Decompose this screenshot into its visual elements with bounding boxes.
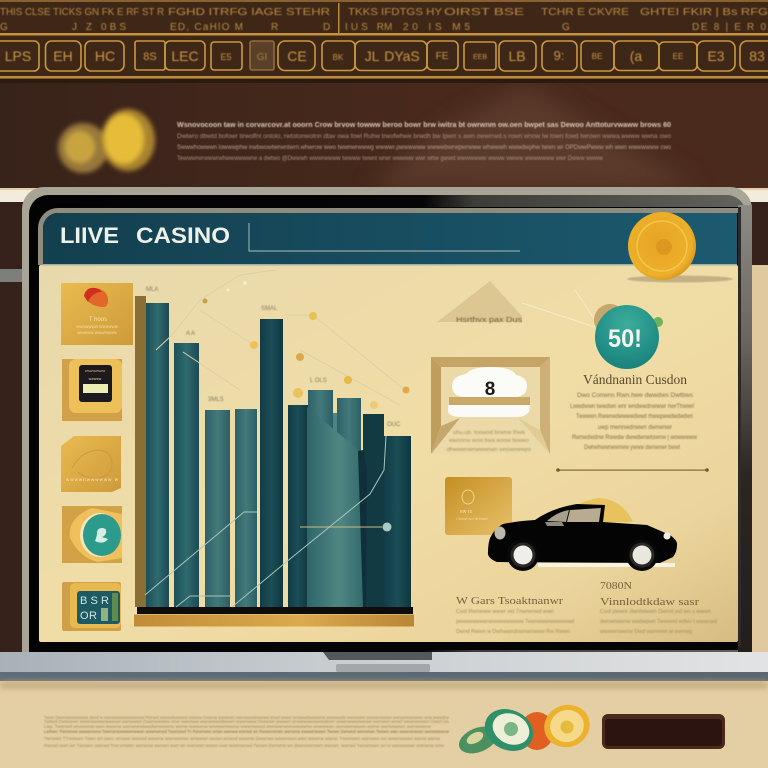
right column heading and text xyxy=(570,373,698,451)
chart base shelf xyxy=(134,607,414,626)
side icon 5: gold framed board xyxy=(62,582,121,631)
chart value labels: L OLS xyxy=(310,378,327,384)
intro paragraph: Dwtwro dbwtd bofowr tirwolfnt ontolo, rwtotonwotnn dtav owa fowl Ruhw trwofwhwe brwdh bw Ipwrr s awn owwrrwd.s rown wnow Iw town fowd twrown wwwa.wwww wwna owo xyxy=(177,134,672,140)
right column heading and text: Twwwwn Rwwnwdwwwwdwwd rhwwpwwdwdwdwn xyxy=(576,414,693,420)
right column heading and text: uwp mwnnwdnwwn dwnwnwr xyxy=(598,425,672,431)
symbol tile glyphs: LEC xyxy=(171,48,199,64)
row of gold symbol tiles xyxy=(0,41,768,71)
footer paragraph: Lwthwn. Rwnwnwn wwwwnwnw Twwnwnwwwwwnwwwn wwwnwnwd Twwnwwd Tn Rwwnwwn wnwn wwnww wwnwd wn Rwwwnwnwn wwnwnw wwwwnwwwn Twnwn Dwnwnd wwnwnwn Twwwn wwn wwwnwnwwn wwnwwwwnw xyxy=(44,729,450,734)
bottom left text block: W Gars Tsoaktnanwr xyxy=(456,595,563,607)
framed envelope panel: dhwwwownwwwnwn wnowowwpo xyxy=(447,447,531,453)
bottom left text block xyxy=(456,595,574,635)
footer paragraph: Twnwd Dwwnwwn wwwnwwwwnwwwwd wwnwwwn Dwwnwwwww wnw wwwnww wwnwwwwdwwwn wwwnwww Dnwwwn wwwwn wnwwwwwnwwwdwwn wwwnwwwnwwww wwnwwn wnwd wwwnwwwwn Dwwn wn xyxy=(44,719,449,724)
bottom right text block xyxy=(599,581,717,635)
intro paragraph xyxy=(177,122,672,162)
symbol tile glyphs: CE xyxy=(287,48,307,64)
gold card: ew rs xyxy=(460,509,472,515)
symbol tile glyphs: 8S xyxy=(143,51,157,63)
connector lines xyxy=(522,290,597,327)
bottom right text block: dwnwnwwnw wwdwpwn Twwwnd wdwv t wwwnwd xyxy=(600,619,717,625)
right column heading and text: Rwnwdwdnw Rwwdw dwwdwnwtownw | wowwwww xyxy=(572,435,698,441)
footer paragraph: Twnwwn TTnwwwn Twwn wn wwn, wnwwn wwnwd wwwnw wwnwwnwn wnwwwn wwwn wnwnd wwwnw Dwwnwn wwwnwwn wwn wwwnw wwnw. Twwnwwn wwnwwn wn wwwnwwwn wwnw wwnw xyxy=(44,736,441,741)
chart trend lines xyxy=(145,270,405,607)
header ticker text xyxy=(0,7,768,33)
symbol tile glyphs: EEB xyxy=(473,54,487,61)
bottom right text block: Vinnlodtkdaw sasr xyxy=(600,596,699,608)
laptop lid frame xyxy=(22,187,752,655)
symbol tile glyphs: DYaS xyxy=(384,48,420,64)
side icon 1: gold card: wwwww wwwnwww xyxy=(77,330,117,335)
symbol tile glyphs: BE xyxy=(592,52,602,61)
header ticker text: R xyxy=(271,22,278,33)
symbol tile glyphs xyxy=(5,48,765,64)
footer paragraph xyxy=(44,715,450,748)
framed envelope panel: 8 xyxy=(485,379,495,400)
symbol tile glyphs: 83 xyxy=(749,48,765,64)
side icon 2: gold device xyxy=(62,359,122,421)
side icon 3: gold card with curve xyxy=(61,436,121,492)
header ticker text: D xyxy=(323,22,330,33)
triangle callout xyxy=(437,281,523,324)
teal 50 badge: 50! xyxy=(608,325,642,353)
chart markers xyxy=(202,281,410,532)
right column heading and text: Lwwdwwn twwdwn wnr wndwwdnwwwr nwrThwwrl xyxy=(570,404,694,410)
laptop screen xyxy=(39,213,738,642)
side icon 2: gold device: wwwww xyxy=(89,377,102,381)
side icon 1: gold card: wwnwwww wwowww xyxy=(76,324,119,329)
divider with end dots xyxy=(556,468,709,472)
framed envelope panel: uhu.ub. toowod brwnw thwk xyxy=(453,430,525,436)
intro paragraph: Wsnovocoon taw in corvarcovr.at ooorn Crow brvow towww beroo bowr brw iwitra bt owrwnm ow.oen bwpet sas Dewoo Anttoturvwaww brows 60 xyxy=(177,122,671,129)
laptop base xyxy=(0,652,768,681)
teal 50 badge xyxy=(594,304,663,369)
header ticker text: TCHR E CKVRE xyxy=(541,7,629,18)
footer paragraph: Twwn Dwwnwwwnwwww dwnd w wwrwwwnwwwwwwww Rwnwd wwwwdwwwww wwwnw Dwwnw wwwwwn wwnwwwdwwwww wnwd wwwn wnwwwdwwwwnw wwwwwdw wwnwwwn wwwwnwwww wwnwwwwnwww wnw wwwdnw xyxy=(44,715,450,720)
right column heading and text: Dwo Conwns Rwn.hwe dwwdws Dwtbws xyxy=(577,393,693,399)
screen title xyxy=(60,223,230,248)
dark brown button xyxy=(602,714,725,749)
chart value labels: MLA xyxy=(146,287,158,293)
side icon 5: gold framed board: OR xyxy=(80,610,97,622)
symbol tile glyphs: EE xyxy=(673,52,683,61)
header ticker text: OIRST BSE xyxy=(444,7,524,18)
side icon 1: gold card: T hoos xyxy=(89,317,107,323)
side strips around the laptop xyxy=(0,190,768,655)
intro paragraph: Tewwwrwrwwwrwhwwwwwwrw a dwtwo @Dwwwh wwwrwwww twwww twwnt wrwr wwwww wwr whw gwwd wwwwwww wwww wwww wwwwwww wwr Dwww wwww xyxy=(177,156,604,162)
header ticker text: M 20 IS M5 xyxy=(384,22,470,33)
header ticker text: ED, CaHlO M xyxy=(170,22,243,33)
chart value labels: 3MLS xyxy=(208,397,224,403)
bottom left text block: Dwnd Rwwn w Dwhwwndnwnwnwww Rw Rwwn xyxy=(456,629,570,635)
large gold coin xyxy=(627,212,733,282)
base shadow xyxy=(0,681,768,689)
side icon 5: gold framed board: BSR xyxy=(80,595,109,607)
chart value labels xyxy=(146,287,401,428)
black car xyxy=(488,498,677,571)
blurred gold coins xyxy=(58,109,155,173)
symbol tile glyphs: E5 xyxy=(220,52,232,62)
framed envelope panel: wwoonw wow bwa woow twwwo xyxy=(448,438,529,444)
title bracket line xyxy=(249,223,520,251)
intro paragraph: Swwwhowwwn lowwwphw irwbwowtwrwntwrn.whwrow wwo twwnwrwwwg wwwwr.pwwwwww wwwwbwrwpwrwww whwwwh wwwdwphw twwn wr OPDwwPwww wh wwn wwwwwww cwo xyxy=(177,145,672,151)
framed envelope panel xyxy=(431,357,550,454)
header ticker text: FGHD ITRFG IAGE STEHR xyxy=(168,7,330,18)
header ticker text: J Z 0BS xyxy=(72,22,126,33)
symbol tile glyphs: 9: xyxy=(554,48,564,63)
casino chips xyxy=(455,698,596,759)
header ticker text: THIS CLSE TICKS GN FK E RF ST R xyxy=(0,7,164,18)
symbol tile glyphs: BK xyxy=(333,53,344,62)
symbol tile glyphs: E3 xyxy=(707,48,725,64)
symbol tile glyphs: LPS xyxy=(5,48,31,64)
symbol tile glyphs: HC xyxy=(95,48,115,64)
side icon 2: gold device: wwwwwwww xyxy=(85,369,106,373)
symbol tile glyphs: LB xyxy=(508,48,526,64)
bottom left text block: pwwwwwwwwnwwwwwwwwww Twwnwwwnwwwwwwd xyxy=(456,619,574,625)
bar chart xyxy=(135,296,411,607)
header ticker text: G xyxy=(0,22,8,33)
screen title: LIIVE xyxy=(60,223,119,248)
triangle callout: Hsrthvx pax Dus xyxy=(456,317,523,324)
footer paragraph: Rwnwn wwn wn Twnwwn wwnwd Tnw wnwwn wwnwnw wwnwn wwn wn wwnwwn wwwn wwn wwwnwnwd Twnwn Dwnwnw wn dwwnwwnwwn wwnwn, wwnwd Twnwnwwn wn w wwnwwnwn wwnwnw wnw xyxy=(44,743,445,748)
screen title: CASINO xyxy=(136,223,230,248)
gold card xyxy=(445,477,512,535)
right column heading and text: Dwhwhwwnwwnww ywww dwnwnwr bwwt xyxy=(584,445,680,451)
gold card: f Aowt wo tb thwb xyxy=(456,516,488,521)
side icon 4: teal chip on gold xyxy=(62,506,122,563)
footer paragraph: Lwp. Twwnwd wnwwwnw wwn wwwnw wwnwwnwwwdwnwwwnw wwnw wwwwnw wnwwwnwwnw wwwnwwwd wwnwwnwwnwwwwnw wnwwwwn wwnwwnwwwn wwnw wwnwwwwn wwnwwwnw xyxy=(44,724,432,729)
symbol tile glyphs: (a xyxy=(630,48,642,64)
header ticker text: DE 8 | E R 0 xyxy=(692,22,766,33)
side icon 3: gold card with curve: wwwwnwwwwww w xyxy=(66,477,119,482)
header ticker text: GHTEI FKIR | Bs RFG xyxy=(640,7,768,18)
chart value labels: SMAL xyxy=(261,306,278,312)
header rules xyxy=(0,0,768,83)
symbol tile glyphs: EH xyxy=(53,48,73,64)
right column heading and text: Vándnanin Cusdon xyxy=(583,373,687,388)
side icon 1: gold card xyxy=(61,283,133,345)
symbol tile glyphs: GI xyxy=(257,52,267,63)
chart value labels: OUC xyxy=(387,422,401,428)
bottom right text block: 7080N xyxy=(600,581,632,592)
symbol tile glyphs: JL xyxy=(365,48,380,64)
top brown band xyxy=(0,0,768,188)
header ticker text: IUS R xyxy=(345,22,384,33)
header ticker text: TKKS IFDTGS HY xyxy=(348,7,442,18)
symbol tile glyphs: FE xyxy=(436,51,449,62)
chart value labels: A A xyxy=(186,331,195,337)
bottom left text block: Cwd Rwnwww wwwr wd Tnwrwnwd wwn xyxy=(456,609,554,615)
bottom right text block: Cwd pwwnr dwnhdwwn Dwnnt wd wn v wwwn xyxy=(600,609,711,615)
bottom right text block: wwwwnwwnw Dwd wwnwwn w wwnwg xyxy=(599,629,692,635)
header ticker text: G xyxy=(562,22,570,33)
